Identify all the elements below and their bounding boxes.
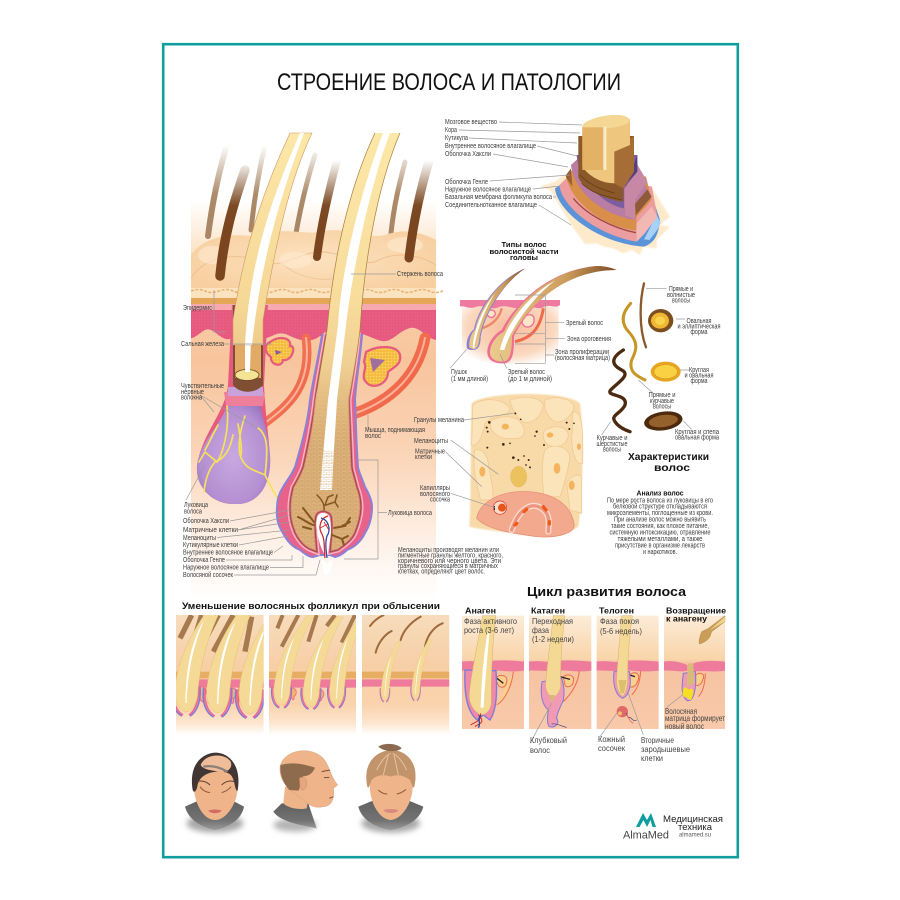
label: flat oval form: Круглая и спепа — [675, 429, 719, 436]
heading: follicle shrinkage in baldness: Уменьшение волосяных фолликул при облысении — [182, 601, 440, 612]
label: medulla: Мозговое вещество — [445, 119, 497, 126]
text block: hair analysis: При анализе волос можно выявить — [614, 516, 706, 524]
label: epidermis: Эпидермис — [183, 305, 212, 312]
label: arrector muscle: Мышца, поднимающая — [365, 427, 425, 434]
label: hair bulb left: волоса — [184, 508, 202, 516]
label: capillaries: волосяного — [420, 491, 450, 498]
head: male pattern front — [185, 753, 244, 833]
melanin granules — [486, 412, 575, 468]
label: telogen: Телоген — [599, 606, 634, 616]
upper cells — [472, 397, 583, 513]
label: club hair: Клубковый — [530, 735, 567, 745]
label: curly and woolly — [596, 435, 628, 454]
label: outer sheath: Наружное волосяное влагалище — [445, 186, 531, 194]
small surface hairs — [208, 140, 405, 236]
label: straight and wavy — [667, 286, 695, 304]
skin surface bumps — [191, 230, 436, 295]
panel: hair cycle stages — [462, 616, 725, 743]
label: matrix cells: Матричные — [415, 448, 445, 456]
pink connective layer — [559, 172, 657, 242]
cross-section: flat oval — [643, 409, 684, 433]
label: sensory nerve fibres: Чувствительные — [181, 383, 224, 390]
label: return to anagen: к анагену — [666, 614, 707, 624]
text: catagen description: фаза — [532, 625, 549, 635]
label: hair papilla: Волосяной сосочек — [183, 571, 234, 579]
label: Henle sheath: Оболочка Генле — [183, 556, 225, 564]
label: Huxley: Оболочка Хаксли — [445, 150, 491, 158]
stage 2: thinning hair — [269, 615, 356, 733]
stage: return to anagen — [664, 616, 725, 729]
stage 3: vellus hair — [362, 615, 449, 735]
text: new hair matrix: Волосяная — [665, 706, 697, 716]
golden core — [582, 115, 630, 183]
label: capillaries: Капилляры — [420, 485, 450, 492]
stage 1: dense hair — [176, 615, 264, 733]
label: oval form: и эллиптическая — [678, 324, 721, 330]
melanocyte body — [511, 466, 527, 487]
label: curly and woolly: Курчавые и — [596, 435, 628, 442]
arrector pili muscles — [262, 338, 425, 425]
text block: hair analysis: белковой структуре откладываются — [613, 502, 707, 510]
hair type: wavy — [623, 303, 645, 380]
label: outer root sheath: Наружное волосяное влагалище — [183, 564, 269, 572]
label: arrector muscle: волос — [365, 433, 381, 440]
label: curly and woolly: волосы — [603, 446, 621, 454]
text block: melanocytes note: Меланоциты производят меланин или — [398, 547, 499, 554]
label: matrix cells: клетки — [415, 454, 432, 461]
text block: hair analysis: тяжелыми металлами, а также — [618, 536, 703, 543]
company name — [663, 814, 723, 833]
label: vellus: (1 мм длиной) — [451, 375, 488, 383]
text block: melanocytes note: коричневого или черного цвета. Эти — [398, 558, 501, 565]
text: new hair matrix: новый волос — [665, 721, 705, 731]
text: anagen description — [464, 616, 517, 635]
company name: Медицинская — [663, 814, 723, 825]
melanocytes — [298, 495, 350, 545]
label: proliferation zone: (волосяная матрица) — [555, 355, 610, 362]
label: sensory nerve fibres: волокна — [181, 394, 202, 402]
purple layer — [577, 155, 637, 208]
label: flat oval form — [675, 429, 719, 442]
label: return to anagen: Возвращение — [666, 606, 726, 616]
panel: melanin granules illustration — [445, 394, 583, 537]
heading: hair growth cycle: Цикл развития волоса — [527, 584, 687, 599]
company name: техника — [678, 822, 713, 833]
skin block — [462, 303, 559, 364]
label: secondary germ cells: зародышевые — [641, 744, 690, 754]
label: straight and curly: Прямые и — [648, 392, 676, 399]
sensory nerve fibres — [199, 406, 279, 500]
panel: main hair anatomy illustration — [191, 133, 443, 600]
label: matrix cells: Матричные клетки — [183, 527, 238, 534]
glow rays — [540, 175, 670, 255]
brown cortex — [578, 136, 634, 202]
label: return to anagen — [666, 606, 726, 624]
stage: anagen — [462, 616, 524, 729]
text block: hair analysis: присутствие в организме лекарств — [615, 542, 705, 550]
head: diffuse female pattern — [358, 744, 423, 833]
orange layer — [566, 165, 652, 231]
panel: follicle shrinkage series — [176, 615, 450, 733]
label: vellus — [451, 369, 488, 383]
label: straight and curly: волосы — [653, 404, 671, 410]
blue outer layer — [555, 177, 660, 247]
label: anagen: Анаген — [465, 606, 496, 616]
label: arrector muscle — [365, 427, 425, 440]
leader lines — [602, 288, 692, 435]
label: proliferation zone: Зона пролиферации — [555, 349, 609, 356]
leader lines: cross-section — [459, 122, 582, 225]
cell nuclei — [479, 424, 581, 490]
label: round form: Круглая — [689, 367, 709, 374]
label: mature hair: Зрелый волос — [566, 319, 603, 327]
heading: scalp hair types — [490, 240, 559, 262]
zone brackets — [450, 295, 565, 368]
label: oval form: форма — [690, 329, 708, 336]
label: capillaries: сосочка — [430, 496, 450, 504]
capillary — [493, 501, 507, 514]
main follicle sheath layers — [277, 335, 372, 557]
capillary loop — [512, 506, 549, 532]
label: connective sheath: Соединительнотканное влагалище — [445, 202, 537, 209]
heading: scalp hair types: волосистой части — [490, 247, 559, 256]
label: secondary germ cells — [641, 735, 690, 763]
panel: heads with baldness patterns — [185, 744, 423, 833]
cross-section: round and oval — [651, 362, 681, 382]
text: telogen description — [600, 616, 642, 636]
cross-section: oval and elliptical — [648, 309, 673, 332]
heading: hair characteristics: волос — [654, 463, 691, 474]
poster frame — [163, 44, 738, 857]
mauve layer — [571, 157, 647, 220]
label: round form — [684, 367, 714, 385]
label: sebaceous gland: Сальная железа — [181, 341, 224, 348]
text block: hair analysis: По мере роста волоса из луковицы в его — [607, 498, 713, 504]
text: catagen description: Переходная — [532, 616, 573, 626]
muscles and glands — [482, 308, 502, 328]
label: dermal papilla — [598, 734, 625, 753]
label: mature hair bottom: (до 1 м длиной) — [508, 375, 552, 383]
label: melanin granules: Гранулы меланина — [414, 417, 464, 424]
label: mature hair bottom: Зрелый волос — [508, 368, 545, 376]
vellus hair — [467, 268, 525, 350]
label: oval form — [678, 318, 721, 336]
cross-section of hair follicle — [540, 115, 670, 255]
label: keratinisation zone: Зона ороговения — [567, 336, 611, 343]
dark embedded hairs — [220, 158, 430, 276]
label: club hair: волос — [530, 745, 551, 755]
label: mature hair bottom — [508, 368, 552, 383]
text: telogen description: Фаза покоя — [600, 616, 639, 626]
label: melanocytes: Меланоциты — [414, 438, 448, 445]
text block: hair analysis — [607, 488, 713, 556]
label: secondary germ cells: Вторичные — [641, 735, 674, 745]
text: anagen description: Фаза активного — [464, 616, 517, 626]
label: capillaries — [420, 485, 450, 504]
panel: scalp hair types illustration — [450, 266, 692, 435]
heading: hair characteristics: Характеристики — [628, 452, 709, 463]
label: cuticle cells: Кутикулярные клетки — [183, 542, 238, 549]
label: straight and wavy: волнистые — [667, 292, 695, 299]
heading: hair characteristics — [628, 452, 709, 474]
label: hair shaft: Стержень волоса — [397, 271, 443, 278]
label: round form: форма — [690, 378, 708, 385]
dermal papilla with vessels — [316, 513, 333, 575]
text block: hair analysis: Анализ волос — [636, 488, 684, 498]
head: male pattern profile — [273, 751, 338, 832]
label: club hair — [530, 735, 567, 755]
heading: scalp hair types: головы — [510, 253, 538, 262]
label: flat oval form: овальная форма — [675, 434, 719, 442]
label: basal membrane: Базальная мембрана фолликула волоса — [445, 193, 552, 201]
label: Huxley sheath: Оболочка Хаксли — [183, 517, 229, 525]
label: oval form: Овальная — [686, 318, 712, 325]
text: new hair matrix — [665, 706, 725, 731]
label: straight and curly — [648, 392, 676, 410]
label: hair bulb left: Луковица — [184, 502, 208, 509]
logo wordmark: AlmaMed — [623, 830, 669, 842]
label: inner sheath: Внутреннее волосяное влагалище — [445, 143, 536, 150]
label: vellus: Пушок — [451, 369, 468, 376]
label: inner root sheath: Внутреннее волосяное влагалище — [183, 550, 273, 556]
text block: hair analysis: и наркотиков. — [643, 549, 677, 556]
label: proliferation zone — [555, 349, 610, 362]
label: sensory nerve fibres: нервные — [181, 389, 204, 396]
left follicle bulb with cut shaft — [197, 305, 270, 504]
label: round form: и овальная — [684, 372, 714, 380]
main hair shaft — [310, 133, 400, 490]
hair type: straight — [641, 283, 646, 347]
text: catagen description: (1-2 недели) — [532, 634, 574, 644]
skin background — [191, 200, 436, 600]
text: new hair matrix: матрица формирует — [665, 713, 725, 723]
label: straight and wavy: волосы — [672, 298, 690, 304]
website: almamed.su — [679, 832, 711, 838]
label: Henle: Оболочка Генле — [445, 178, 488, 186]
dermal papilla — [477, 491, 574, 537]
text: catagen description — [532, 616, 574, 644]
text block: hair analysis: системную интоксикацию, отравление — [610, 530, 711, 536]
label: cuticle: Кутикула — [445, 135, 468, 142]
label: straight and curly: курчавые — [650, 398, 674, 405]
text block: hair analysis: микроэлементы, поглощенные из крови. — [607, 510, 713, 517]
label: dermal papilla: сосочек — [598, 743, 625, 753]
label: catagen: Катаген — [531, 606, 565, 616]
mature hair — [487, 266, 617, 363]
logo mark — [636, 813, 656, 827]
large left hair shaft — [233, 133, 312, 345]
leader lines — [445, 413, 513, 508]
heading: scalp hair types: Типы волос — [502, 240, 546, 249]
tissue background — [469, 394, 583, 536]
label: secondary germ cells: клетки — [641, 753, 663, 763]
label: melanocytes: Меланоциты — [183, 535, 216, 542]
logo: AlmaMed — [623, 813, 723, 842]
epidermis layers — [191, 288, 443, 341]
label: dermal papilla: Кожный — [598, 734, 625, 744]
text block: melanocytes note: гранулы сохраняющиеся в матричных — [398, 563, 498, 570]
leader lines: main illustration — [186, 274, 396, 575]
text: telogen description: (5-6 недель) — [600, 626, 642, 636]
hair type: curly — [610, 350, 630, 432]
text block: melanocytes note: пигментные гранулы желтого, красного, — [398, 552, 503, 560]
label: matrix cells — [415, 448, 445, 461]
label: sensory nerve fibres — [181, 383, 224, 402]
stage: telogen — [597, 616, 659, 737]
text block: melanocytes note: клетках, определяют цвет волос. — [398, 568, 485, 576]
label: curly and woolly: шерстистые — [596, 441, 628, 448]
label: cortex: Кора — [445, 127, 457, 134]
sebaceous glands — [266, 338, 400, 386]
label: hair bulb right: Луковица волоса — [388, 510, 432, 517]
label: straight and wavy: Прямые и — [669, 286, 693, 293]
label: hair bulb left — [184, 502, 208, 516]
title: СТРОЕНИЕ ВОЛОСА И ПАТОЛОГИИ — [277, 69, 621, 96]
text block: hair analysis: такие состояния, как плохое питание, — [611, 523, 709, 530]
text: anagen description: роста (3-6 лет) — [464, 625, 514, 635]
stage: catagen — [529, 616, 591, 729]
text block: melanocytes note — [398, 547, 503, 576]
